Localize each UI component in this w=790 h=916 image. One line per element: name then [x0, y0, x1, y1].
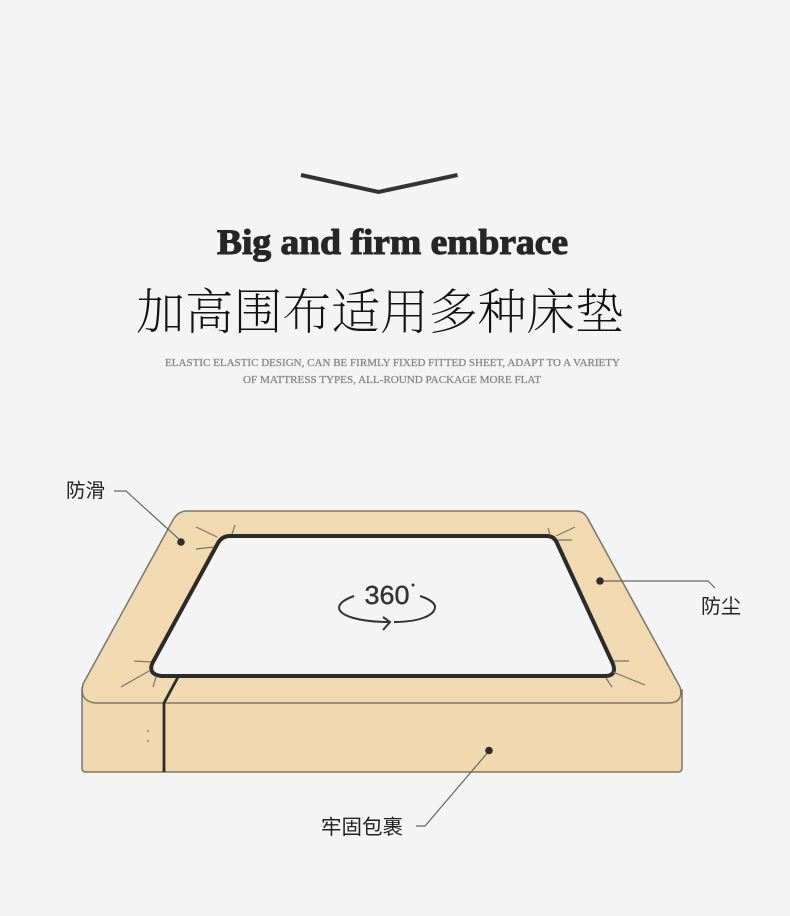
elastic opening: [151, 536, 614, 676]
mattress top with sheet band: [82, 511, 681, 703]
text block: description: OF MATTRESS TYPES, ALL-ROUND PACKAGE MORE FLAT: [243, 375, 542, 386]
heading: Chinese title: 加高围布适用多种床垫: [136, 285, 624, 340]
stitch marks: [147, 730, 149, 742]
callout: dustproof: [596, 577, 741, 618]
text block: description: ELASTIC ELASTIC DESIGN, CAN BE FIRMLY FIXED FITTED SHEET, ADAPT TO A VARIETY: [165, 358, 620, 369]
callout: dustproof: 防尘: [701, 595, 741, 618]
callout: firm wrap: [321, 747, 493, 839]
icon: chevron: [301, 175, 458, 192]
icon: 360 degree rotation: 360: [364, 580, 410, 610]
mattress diagram: [82, 511, 682, 772]
wrinkle lines: [121, 525, 645, 687]
text block: description: [165, 358, 620, 386]
icon: 360 degree rotation: [339, 580, 435, 630]
callout: firm wrap: 牢固包裹: [321, 816, 403, 839]
mattress side: [82, 688, 682, 772]
fabric seam: [164, 677, 178, 772]
heading: English title: Big and firm embrace: [217, 222, 568, 262]
callout: anti-slip: 防滑: [66, 480, 105, 502]
callout: anti-slip: [66, 480, 185, 546]
